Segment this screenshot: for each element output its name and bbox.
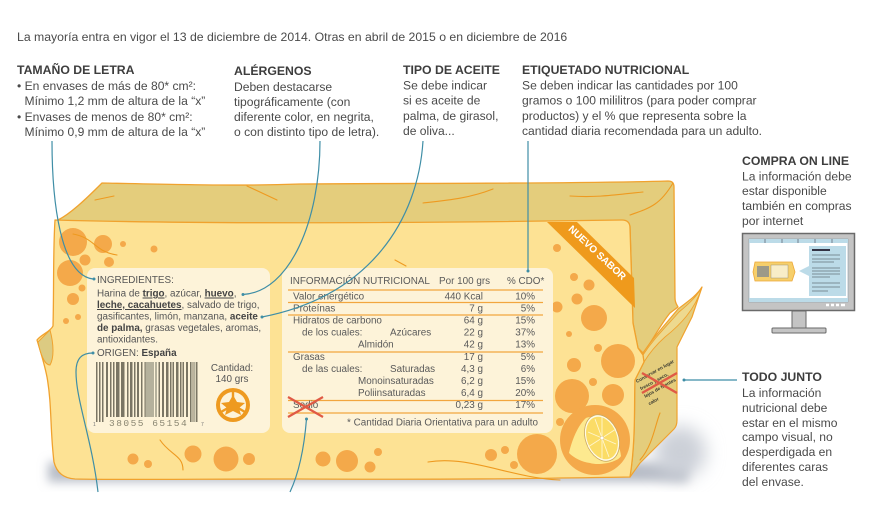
mini package [753,262,795,281]
callout line: tipo de aceite [260,141,423,318]
panel: ingredients label: INGREDIENTES: [97,275,174,286]
callout line: todo junto [682,378,737,382]
text block: etiquetado nutricional [522,63,762,138]
red cross on sodio [288,397,323,417]
panel: ingredients label [87,268,270,433]
left ear [38,330,53,365]
barcode: 1 [93,422,96,428]
panel: nutrition table: Azúcares [390,328,431,338]
text block: todo junto: estar en el mismo [742,416,838,430]
panel: nutrition table: Valor energético [293,292,365,302]
panel: nutrition table: de los cuales: [302,328,362,338]
text block: alérgenos [234,63,379,139]
panel: nutrition table: Proteínas [293,304,335,314]
panel: nutrition table: 17 g [464,352,483,363]
text block: alérgenos: o con distinto tipo de letra). [234,125,379,139]
side small print: lejos de fuentes [643,377,677,399]
barcode: 7 [201,422,204,428]
text block: todo junto: diferentes caras [742,460,828,474]
panel: nutrition table: 5% [521,304,535,314]
panel: nutrition table: Almidón [358,340,394,350]
wrinkles [73,183,673,480]
text block: tamaño de letra [17,62,205,139]
text block: compra on line: también en compras [742,199,852,213]
package shadow [48,426,706,482]
orange dots [57,228,635,474]
panel: nutrition table: 5% [521,352,535,363]
panel: ingredients label: antioxidantes. [97,334,158,346]
package illustration [37,181,702,480]
panel: nutrition table: 20% [515,388,535,399]
panel: nutrition table: 42 g [464,340,483,350]
side panel [630,287,702,477]
lemon badge [560,405,630,475]
monitor stand [792,311,806,328]
text block: tamaño de letra: Mínimo 0,9 mm de altura de la “x” [24,125,205,139]
cantidad: Cantidad: [211,363,253,374]
panel: nutrition table: 37% [515,328,535,338]
panel: nutrition table: Grasas [293,352,325,363]
callout line: etiquetado nutricional [526,141,530,272]
callout line: tamaño de letra [52,141,96,280]
text block: compra on line: COMPRA ON LINE [742,154,849,168]
panel: nutrition table: de las cuales: [302,364,362,375]
front face [37,220,644,479]
nuevo sabor band [547,222,635,308]
side small print: fresco y seco, [639,372,669,391]
icon: recycling [216,388,250,422]
top flap [58,181,678,353]
side leaf fold [643,287,702,362]
panel: nutrition table: 64 g [464,316,483,326]
text block: alérgenos: tipográficamente (con [234,95,350,109]
text block: tipo de aceite: palma, de girasol, [403,109,498,123]
text block: alérgenos: Deben destacarse [234,80,332,94]
panel: nutrition table: * Cantidad Diaria Orientativa para un adulto [347,418,539,428]
panel: nutrition table: 7 g [469,304,483,314]
side small print [635,359,687,406]
panel: nutrition table: 6,4 g [461,388,483,399]
text block: todo junto: TODO JUNTO [742,370,822,384]
text block: todo junto: La información [742,386,821,400]
barcode: 38055 65154 [109,418,188,429]
text block: compra on line [742,154,852,228]
text block: etiquetado nutricional: productos) y el % que representa sobre la [522,109,747,123]
side small print: calor [647,396,660,406]
text block: todo junto [742,370,838,489]
panel: ingredients label: leche, cacahuetes, salvado de trigo, [97,300,260,311]
panel: nutrition table: Por 100 grs [439,276,490,287]
panel: nutrition table: INFORMACIÓN NUTRICIONAL [290,276,430,287]
panel: ingredients label: ORIGEN: España [97,348,177,359]
text block: todo junto: del envase. [742,475,804,489]
panel: nutrition table: Poliinsaturadas [358,388,426,399]
text block: tamaño de letra: • Envases de menos de 80* cm²: [17,110,193,124]
text block: tipo de aceite: si es aceite de [403,94,481,108]
panel: nutrition table: 22 g [464,328,483,338]
panel: nutrition table: Saturadas [390,364,435,375]
text block: tipo de aceite: Se debe indicar [403,78,487,92]
panel: nutrition table: 10% [515,292,535,302]
text block: etiquetado nutricional: gramos o 100 mililitros (para poder comprar [522,94,757,108]
callout line: origen [76,352,98,492]
text block: todo junto: campo visual, no [742,430,833,444]
text block: etiquetado nutricional: Se deben indicar las cantidades por 100 [522,78,738,92]
panel: nutrition table: 0,23 g [456,400,483,411]
panel: nutrition table: % CDO* [507,276,544,287]
side small print: Conservar en lugar [635,359,675,384]
panel: ingredients label: de palma, grasas vegetales, aromas, [97,323,261,334]
panel: nutrition table: 440 Kcal [445,292,483,302]
text block: tipo de aceite [403,63,500,138]
panel: nutrition table: 4,3 g [461,364,483,375]
callout line: sodio [290,418,308,492]
text block: etiquetado nutricional: ETIQUETADO NUTRICIONAL [522,63,690,77]
text block: compra on line: estar disponible [742,184,827,198]
table rules [288,290,543,413]
panel: ingredients label: Harina de trigo, azúcar, huevo, [97,288,236,300]
text block: tamaño de letra: Mínimo 1,2 mm de altura de la “x” [24,94,205,108]
barcode [93,362,204,429]
panel: nutrition table: 13% [515,340,535,350]
text block: tipo de aceite: TIPO DE ACEITE [403,63,500,77]
panel: nutrition table: 17% [515,400,535,411]
text block: tamaño de letra: TAMAÑO DE LETRA [17,62,135,77]
panel: nutrition table: 6% [521,364,535,375]
text block: compra on line: por internet [742,214,804,228]
text block: tamaño de letra: • En envases de más de 80* cm²: [17,79,196,93]
red cross on side text [642,373,677,393]
text block: compra on line: La información debe [742,170,852,184]
panel: nutrition table: 6,2 g [461,376,483,387]
panel: nutrition table: Sodio [293,400,319,411]
text block: tipo de aceite: de oliva... [403,124,455,138]
icon: computer monitor [742,234,854,333]
panel: nutrition table: 15% [515,376,535,387]
text block: todo junto: desperdigada en [742,445,832,459]
text block: etiquetado nutricional: cantidad diaria recomendada para un adulto. [522,124,762,138]
panel: ingredients label: gasificantes, limón, manzana, aceite [97,312,258,322]
panel: ingredients label: 140 grs [216,374,249,385]
panel: nutrition table [282,268,553,433]
text block: alérgenos: ALÉRGENOS [234,63,312,78]
callout line: alérgenos [242,141,320,296]
panel: nutrition table: Hidratos de carbono [293,316,382,326]
text block: todo junto: nutricional debe [742,401,828,415]
intro text: La mayoría entra en vigor el 13 de diciembre de 2014. Otras en abril de 2015 o en diciembre de 2016 [17,30,567,44]
panel: nutrition table: Monoinsaturadas [358,376,434,387]
nuevo sabor band: NUEVO SABOR [566,224,628,283]
panel: nutrition table: 15% [515,316,535,326]
text block: alérgenos: diferente color, en negrita, [234,110,374,124]
